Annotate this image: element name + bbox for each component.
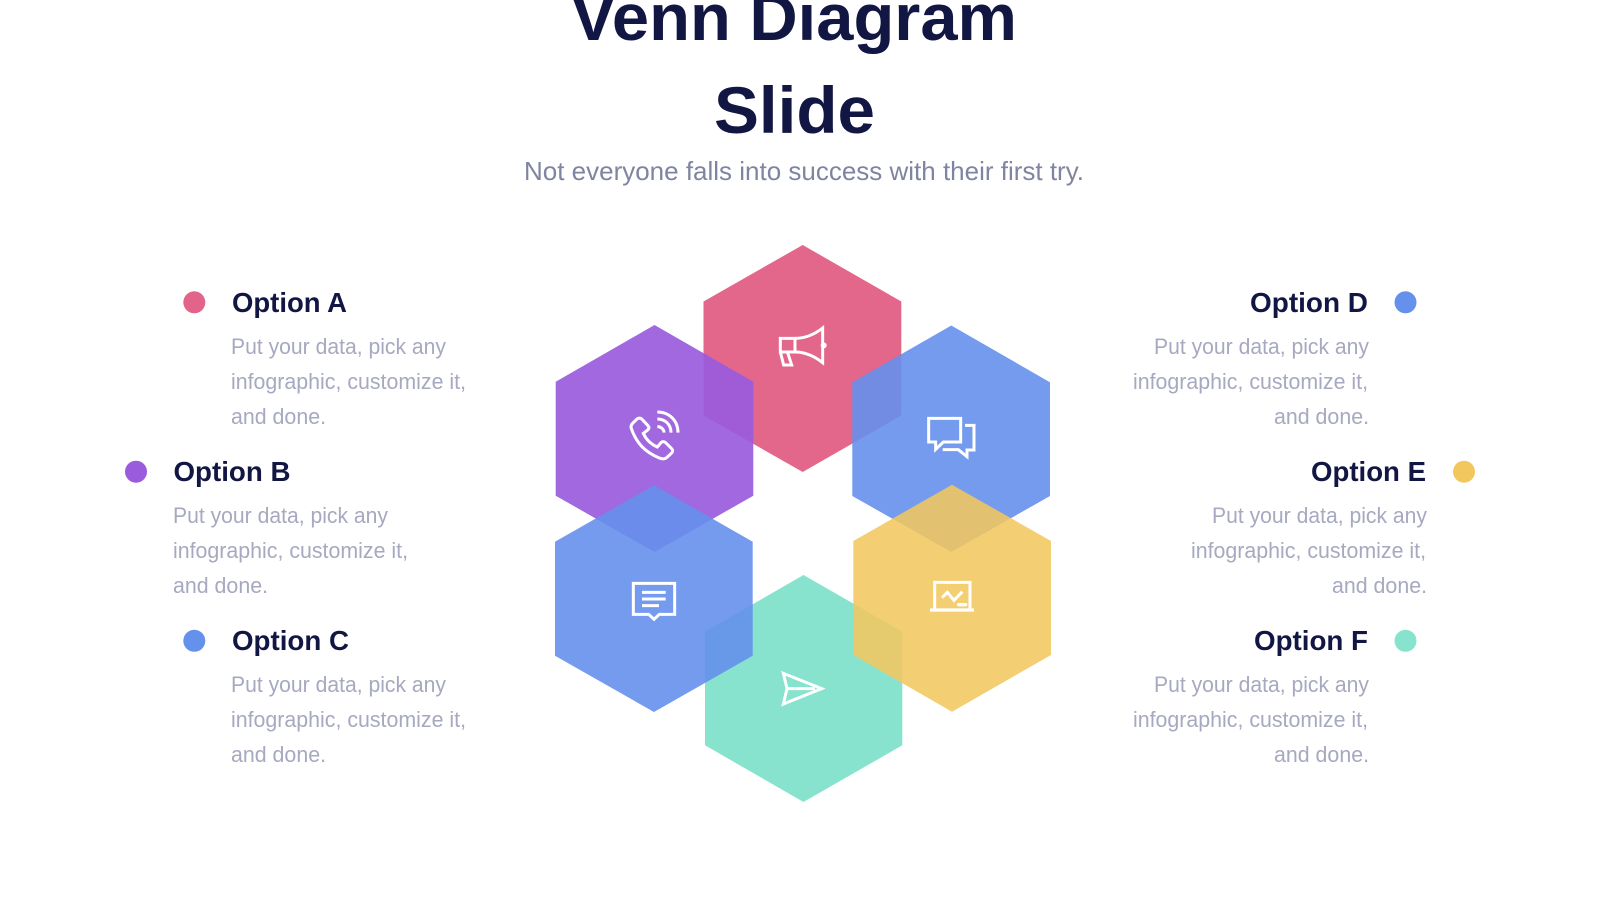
body C: infographic, customize it, (231, 707, 466, 732)
heading C: Option C (232, 625, 349, 656)
body F: infographic, customize it, (1133, 707, 1368, 732)
hexagon venn diagram (555, 245, 1051, 802)
body D (1133, 334, 1369, 429)
heading A: Option A (232, 287, 347, 318)
body A: Put your data, pick any (231, 334, 446, 359)
hexagon: green (705, 575, 902, 802)
body C (231, 672, 466, 767)
dot A (183, 291, 205, 313)
body D: and done. (1274, 404, 1369, 429)
body D: infographic, customize it, (1133, 369, 1368, 394)
icon: presentation board (930, 582, 974, 610)
body E: and done. (1332, 573, 1427, 598)
body B: Put your data, pick any (173, 503, 388, 528)
hexagon: purple (556, 325, 753, 552)
option C (183, 625, 466, 767)
body B: infographic, customize it, (173, 538, 408, 563)
dot B (125, 461, 147, 483)
body B: and done. (173, 573, 268, 598)
icon: phone (631, 412, 678, 459)
option B (125, 456, 408, 598)
icon: message (633, 583, 675, 619)
heading B: Option B (174, 456, 290, 487)
body D: Put your data, pick any (1154, 334, 1369, 359)
dot D (1394, 291, 1416, 313)
hexagon: pink (704, 245, 901, 472)
heading F: Option F (1254, 625, 1368, 656)
body F: Put your data, pick any (1154, 672, 1369, 697)
dot C (183, 630, 205, 652)
body E (1191, 503, 1427, 598)
body C: and done. (231, 742, 326, 767)
icon: paper plane (783, 673, 822, 704)
body A: and done. (231, 404, 326, 429)
body B (173, 503, 408, 598)
option A (183, 287, 466, 429)
option E (1191, 456, 1475, 598)
body A (231, 334, 466, 429)
heading E: Option E (1311, 456, 1426, 487)
icon: chat bubbles (929, 418, 974, 457)
option F (1133, 625, 1416, 767)
hexagon: yellow (853, 485, 1051, 712)
icon: megaphone (780, 328, 827, 365)
dot F (1394, 630, 1416, 652)
body A: infographic, customize it, (231, 369, 466, 394)
body C: Put your data, pick any (231, 672, 446, 697)
hexagon: blue right (852, 326, 1050, 552)
body F (1133, 672, 1369, 767)
hexagon: blue left (555, 485, 753, 712)
title: Slide (714, 73, 875, 147)
body F: and done. (1274, 742, 1369, 767)
body E: infographic, customize it, (1191, 538, 1426, 563)
body E: Put your data, pick any (1212, 503, 1427, 528)
title (571, 0, 1017, 147)
option D (1133, 287, 1416, 429)
dot E (1453, 461, 1475, 483)
heading D: Option D (1250, 287, 1368, 318)
subtitle: Not everyone falls into success with their first try. (524, 156, 1084, 186)
